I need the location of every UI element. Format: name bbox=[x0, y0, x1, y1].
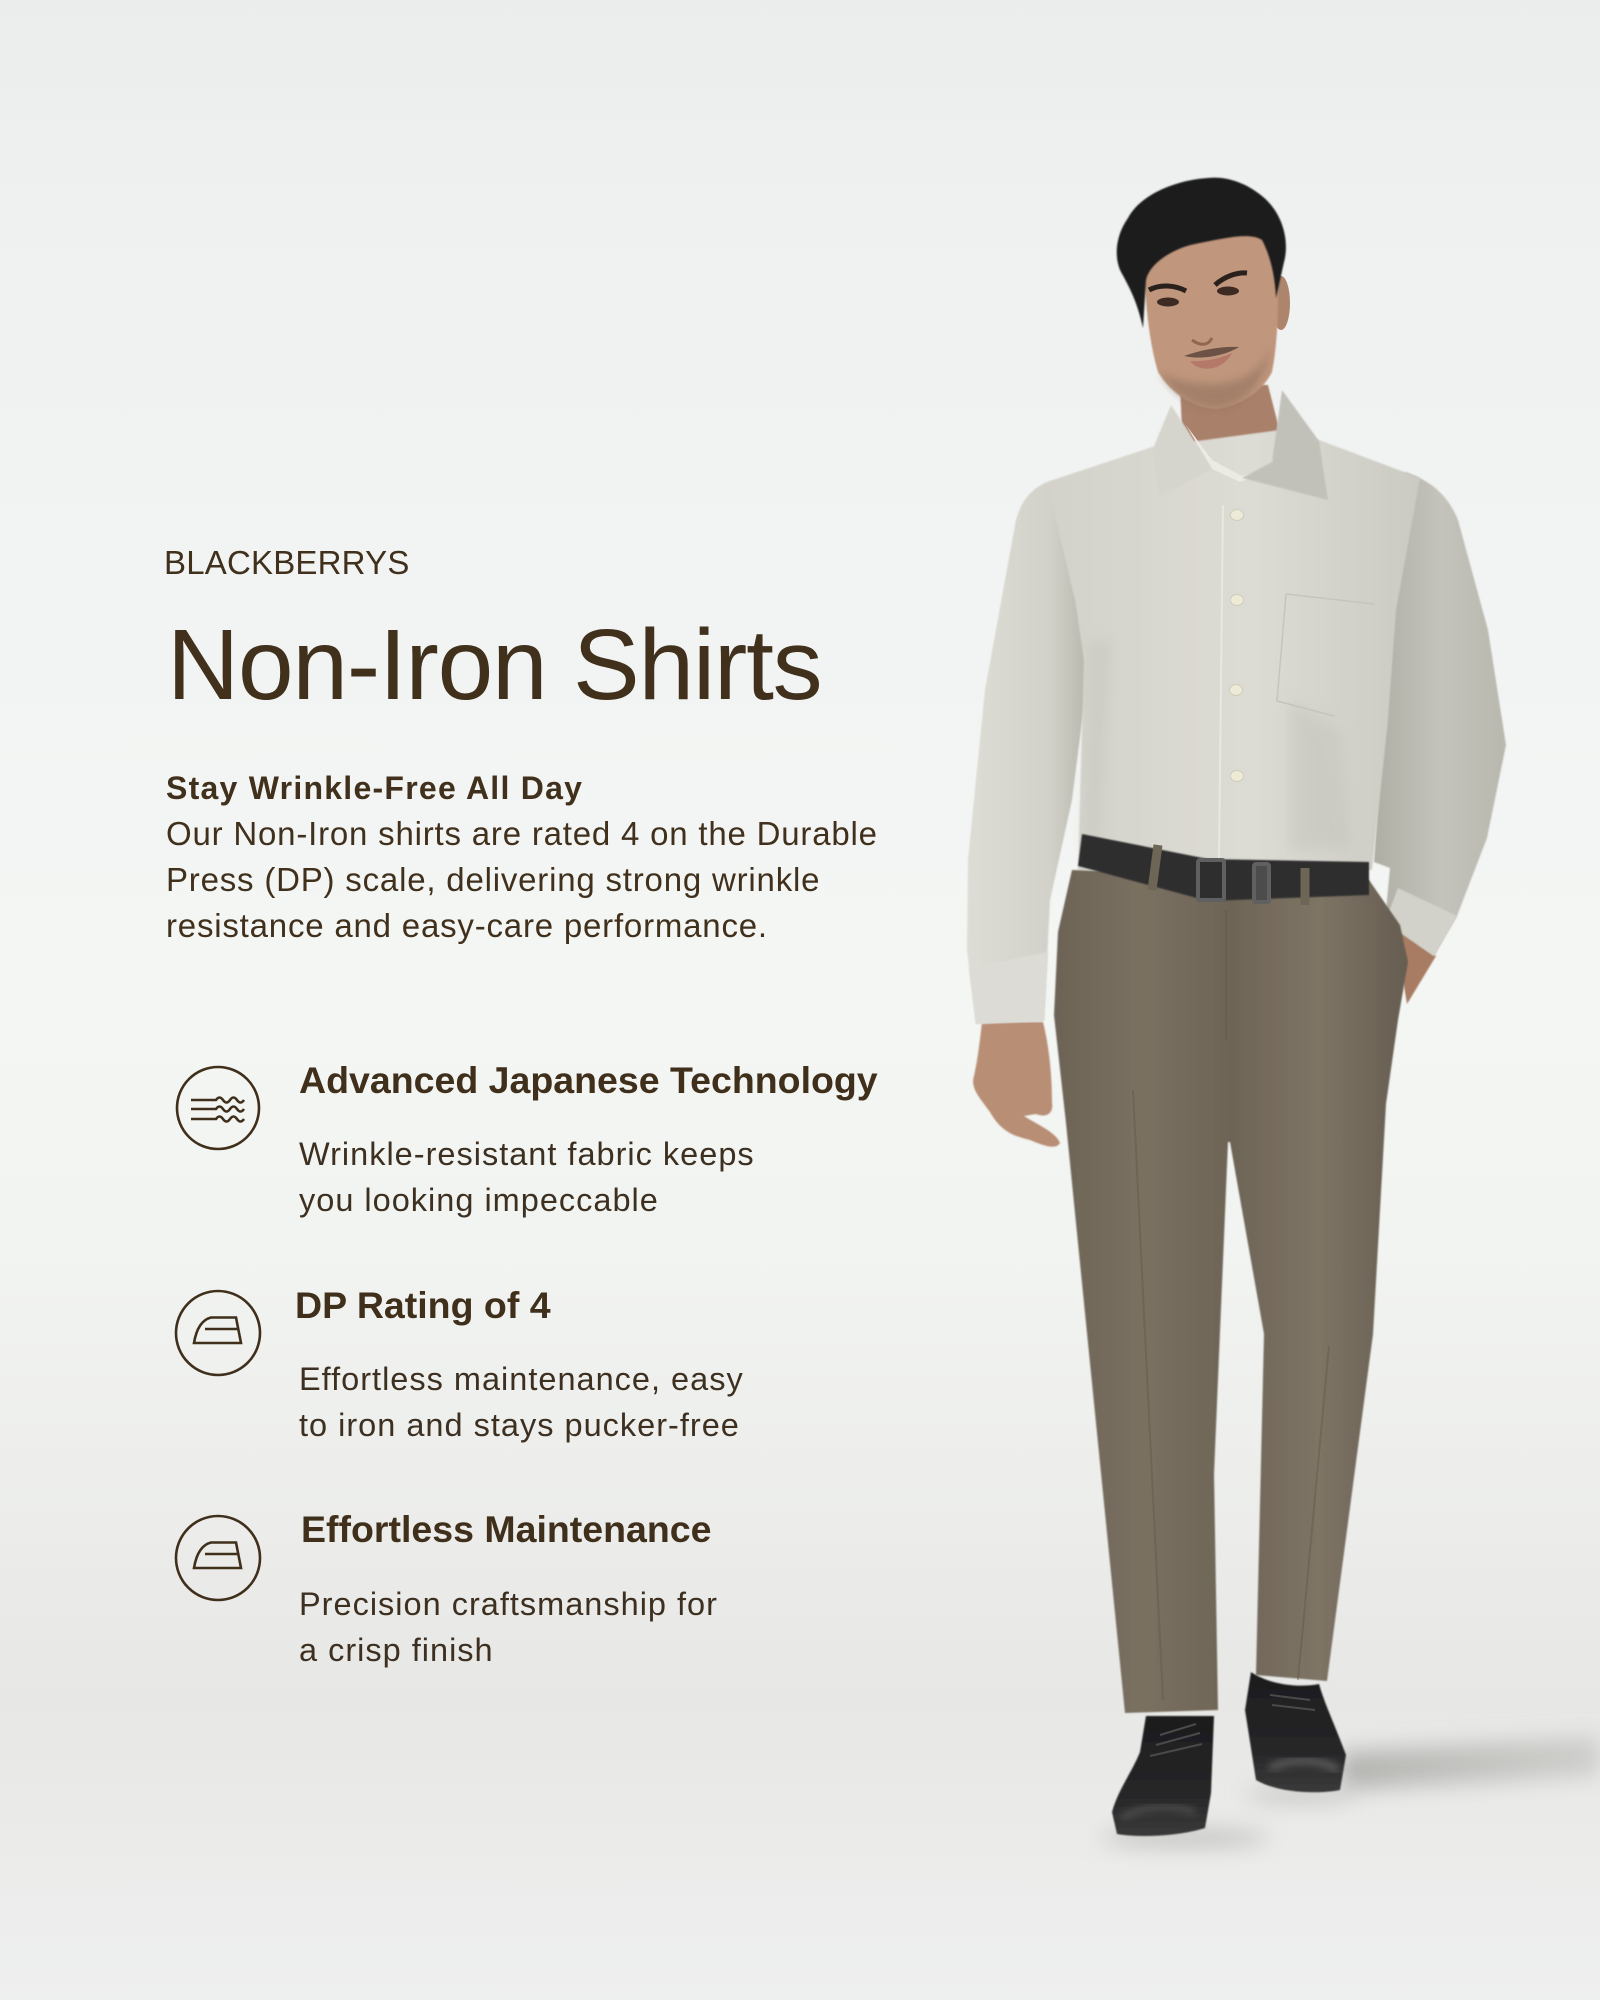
intro text block bbox=[166, 770, 878, 944]
intro body: Press (DP) scale, delivering strong wrinkle bbox=[166, 861, 820, 898]
description bbox=[299, 1586, 718, 1668]
torso bbox=[1047, 430, 1420, 870]
description: you looking impeccable bbox=[299, 1182, 659, 1218]
heading: DP Rating of 4 bbox=[295, 1284, 551, 1326]
icon: iron bbox=[174, 1290, 262, 1376]
description: Effortless maintenance, easy bbox=[299, 1361, 744, 1397]
left shoe bbox=[1112, 1716, 1214, 1836]
beard stubble bbox=[1160, 345, 1272, 409]
heading: Effortless Maintenance bbox=[301, 1508, 712, 1550]
intro subheading: Stay Wrinkle-Free All Day bbox=[166, 770, 583, 806]
eyebrows, eyes, nose, mouth bbox=[1149, 273, 1247, 369]
figure: man in shirt and trousers bbox=[967, 178, 1506, 1836]
belt loops bbox=[1152, 845, 1305, 905]
description: a crisp finish bbox=[299, 1632, 494, 1668]
belt bbox=[1078, 834, 1369, 901]
description: to iron and stays pucker-free bbox=[299, 1407, 740, 1443]
floor shadow bbox=[1100, 1736, 1600, 1847]
icon: iron bbox=[174, 1514, 262, 1602]
heading: Advanced Japanese Technology bbox=[299, 1059, 878, 1101]
placket bbox=[1219, 505, 1223, 860]
right hand in pocket bbox=[1386, 920, 1436, 1004]
intro body: Our Non-Iron shirts are rated 4 on the Durable bbox=[166, 815, 878, 852]
collar bbox=[1152, 390, 1328, 500]
shirt fold shading bbox=[1085, 640, 1352, 850]
description bbox=[299, 1361, 744, 1443]
shirt buttons bbox=[1230, 510, 1244, 782]
pocket bbox=[1277, 594, 1374, 716]
shirt inner collar band bbox=[1186, 425, 1282, 482]
ear bbox=[1272, 276, 1290, 330]
left sleeve bbox=[967, 482, 1086, 1024]
icon: fabric waves bbox=[176, 1066, 260, 1150]
neck bbox=[1180, 385, 1282, 480]
brand label: BLACKBERRYS bbox=[164, 544, 410, 581]
intro body: resistance and easy-care performance. bbox=[166, 907, 768, 944]
title: Non-Iron Shirts bbox=[167, 609, 821, 721]
right shoe bbox=[1245, 1672, 1346, 1792]
right sleeve bbox=[1374, 472, 1506, 956]
feature: dp rating of 4 bbox=[174, 1284, 744, 1443]
feature: advanced japanese technology bbox=[176, 1059, 878, 1218]
feature: effortless maintenance bbox=[174, 1508, 718, 1668]
left hand bbox=[973, 1022, 1060, 1147]
description: Wrinkle-resistant fabric keeps bbox=[299, 1136, 755, 1172]
hair bbox=[1117, 178, 1286, 328]
trousers bbox=[1054, 870, 1408, 1713]
description: Precision craftsmanship for bbox=[299, 1586, 718, 1622]
belt buckle bbox=[1198, 860, 1269, 902]
left cuff bbox=[969, 952, 1048, 1024]
face bbox=[1143, 225, 1278, 409]
intro body bbox=[166, 815, 878, 944]
right cuff bbox=[1385, 888, 1457, 956]
description bbox=[299, 1136, 755, 1218]
trouser creases bbox=[1133, 910, 1329, 1700]
